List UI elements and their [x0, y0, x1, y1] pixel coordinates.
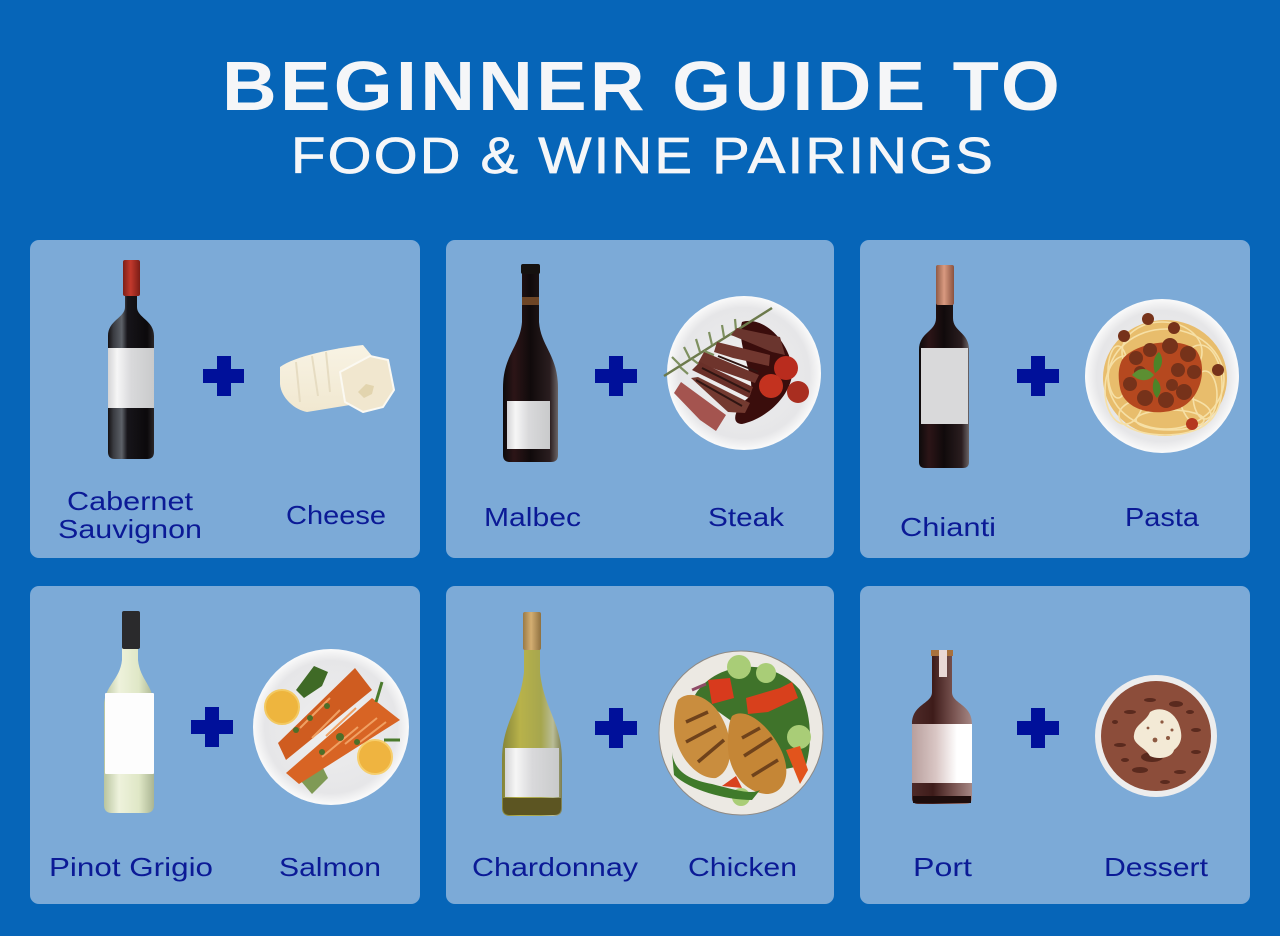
- label: Salmon: Salmon: [279, 852, 381, 882]
- bottle: Pinot Grigio: [104, 611, 154, 813]
- bottle: Port: [912, 650, 972, 804]
- bottle: Chardonnay: [502, 612, 562, 816]
- label: Cheese: Cheese: [286, 500, 386, 530]
- plus sign: [203, 356, 244, 396]
- plus sign: [1017, 356, 1059, 396]
- panel: Chardonnay and Chicken: [446, 586, 834, 904]
- plate: pasta: [1085, 299, 1239, 453]
- plate: salmon: [253, 649, 409, 805]
- label: Cabernet Sauvignon: Sauvignon: [58, 514, 202, 544]
- label: Dessert: Dessert: [1104, 852, 1209, 882]
- plus sign: [1017, 708, 1059, 748]
- label: Cabernet Sauvignon: Cabernet: [67, 486, 194, 516]
- bottle: Malbec: [503, 264, 558, 462]
- label: Steak: Steak: [708, 502, 785, 532]
- plus sign: [595, 708, 637, 748]
- label: Pinot Grigio: Pinot Grigio: [49, 852, 213, 882]
- panel: Port and Dessert: [860, 586, 1250, 904]
- panel: Malbec and Steak: [446, 240, 834, 558]
- cup: dessert: [1095, 675, 1217, 797]
- label: Malbec: Malbec: [484, 502, 581, 532]
- bottle: Chianti: [919, 265, 969, 468]
- plus sign: [191, 707, 233, 747]
- plus sign: [595, 356, 637, 396]
- label: Chianti: Chianti: [900, 512, 996, 542]
- label: Port: Port: [913, 852, 973, 882]
- label: Pasta: Pasta: [1125, 502, 1200, 532]
- title: [222, 47, 1063, 184]
- bottle: Cabernet Sauvignon: [108, 260, 154, 459]
- panel: Pinot Grigio and Salmon: [30, 586, 420, 904]
- panel: Chianti and Pasta: [860, 240, 1250, 558]
- panel: Cabernet Sauvignon and Cheese: [30, 240, 420, 558]
- title: BEGINNER GUIDE TO: [222, 47, 1063, 125]
- plate: chicken: [659, 651, 823, 815]
- cheese: [280, 345, 394, 412]
- title: FOOD & WINE PAIRINGS: [291, 127, 995, 184]
- label: Chardonnay: Chardonnay: [472, 852, 638, 882]
- label: Chicken: Chicken: [688, 852, 797, 882]
- plate: steak: [664, 296, 821, 450]
